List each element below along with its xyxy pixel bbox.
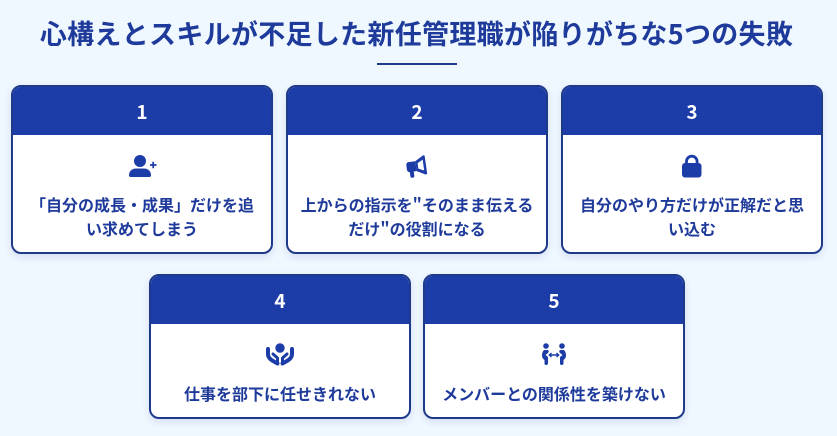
icon: megaphone [406, 155, 428, 178]
panel: failure 5 [423, 274, 684, 419]
panel: failure 2 [286, 85, 548, 254]
icon: lock [682, 154, 702, 178]
number header 4 [149, 274, 411, 324]
icon: person plus [129, 155, 156, 177]
icon: two people with arrow [542, 343, 566, 365]
number header 3 [561, 85, 823, 135]
title: 心構えとスキルが不足した新任管理職が陥りがちな5つの失敗 [40, 13, 793, 52]
text: failure 1: 「自分の成長・成果」だけを追い求めてしまう [30, 192, 254, 240]
number header 4: 4 [274, 287, 286, 314]
panel: failure 1 [11, 85, 272, 254]
number header 2 [286, 85, 548, 135]
text: failure 4: 仕事を部下に任せきれない [184, 381, 376, 405]
number header 2: 2 [411, 98, 423, 125]
panel: failure 3 [561, 85, 822, 254]
icon: hands holding [266, 343, 294, 366]
text: failure 3: 自分のやり方だけが正解だと思い込む [580, 192, 804, 240]
text: failure 2: 上からの指示を"そのまま伝えるだけ"の役割になる [301, 192, 533, 240]
number header 5 [423, 274, 685, 324]
panel: failure 4 [149, 274, 410, 419]
text: failure 5: メンバーとの関係性を築けない [442, 381, 666, 405]
number header 1 [11, 85, 273, 135]
number header 1: 1 [136, 98, 148, 125]
title underline [377, 63, 457, 65]
number header 5: 5 [548, 287, 560, 314]
number header 3: 3 [686, 98, 698, 125]
